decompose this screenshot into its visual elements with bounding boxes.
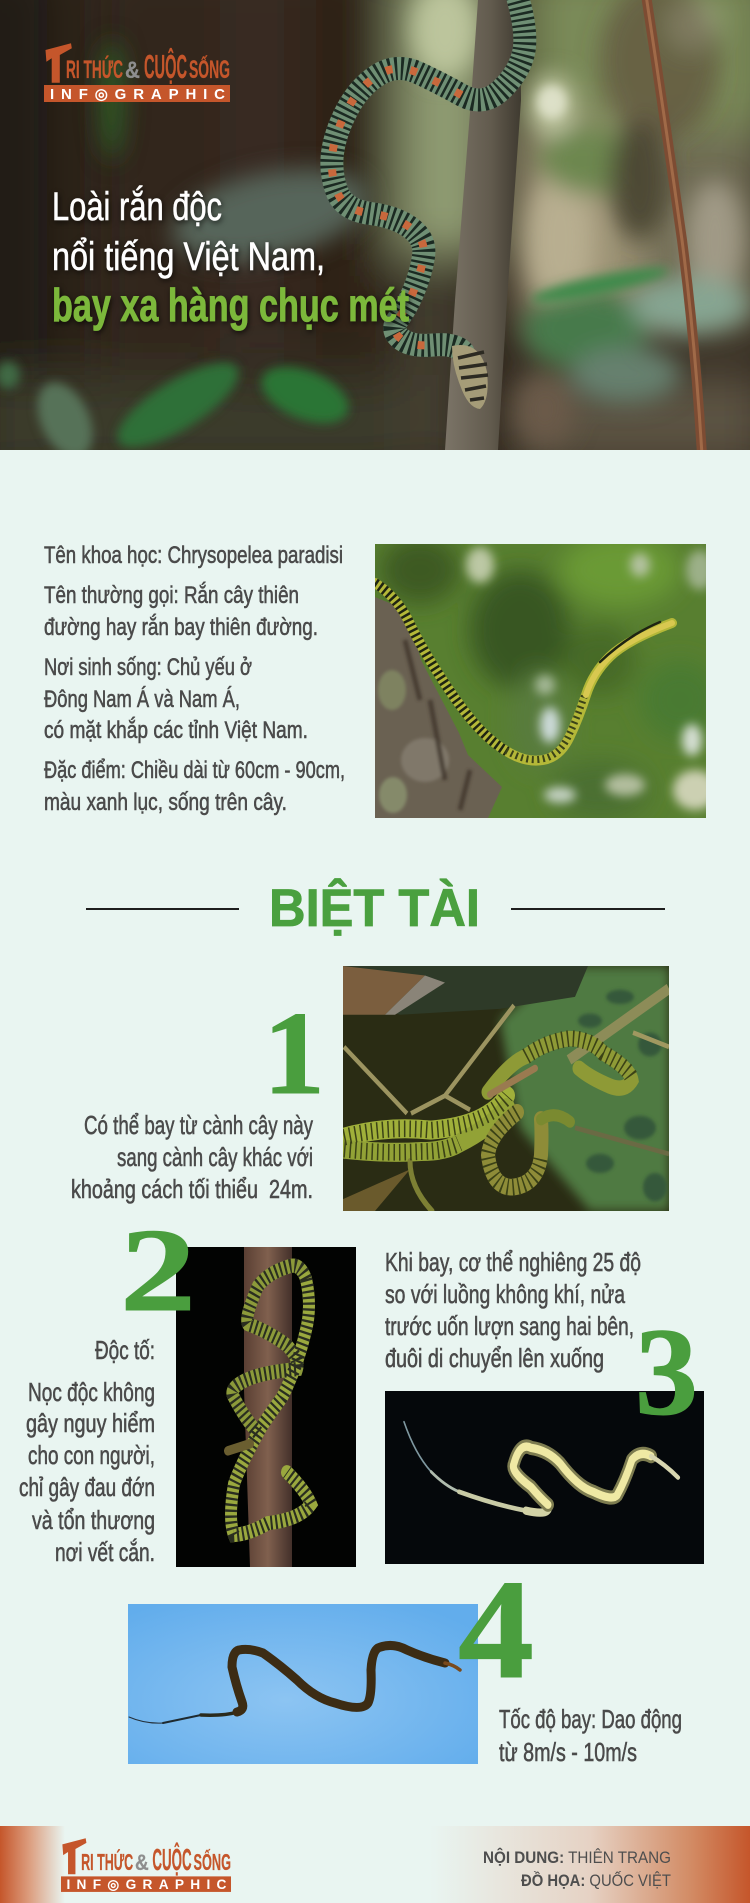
- text block: facts: Đông Nam Á và Nam Á,: [44, 686, 240, 713]
- footer logo: CUỘC: [152, 1843, 192, 1877]
- text block: facts: [44, 542, 345, 816]
- credits: NỘI DUNG: THIÊN TRANG: [483, 1848, 671, 1867]
- credits: [483, 1848, 671, 1890]
- text: skill 2: [19, 1335, 155, 1567]
- text: skill 1: sang cành cây khác với: [117, 1142, 313, 1172]
- snake body: [332, 0, 525, 352]
- footer logo: INF◎GRAPHIC: [66, 1877, 227, 1892]
- text: skill 2: nơi vết cắn.: [55, 1537, 155, 1567]
- text: skill 2: gây nguy hiểm: [26, 1408, 155, 1438]
- panel: header photo with title: [0, 0, 750, 490]
- title: Loài rắn độc: [52, 184, 222, 229]
- photo: snake in blue sky: [128, 1604, 478, 1764]
- text: skill 3: [385, 1247, 641, 1373]
- title: bay xa hàng chục mét: [52, 279, 409, 331]
- panel: skill 3: [385, 1247, 704, 1564]
- text block: facts: Đặc điểm: Chiều dài từ 60cm - 90cm,: [44, 757, 345, 784]
- snake head: [452, 345, 488, 409]
- photo: snake gliding at night: [385, 1391, 704, 1564]
- text: skill 1: [71, 1110, 313, 1204]
- logo: Tri Thức & Cuộc Sống: CUỘC: [144, 47, 187, 85]
- text block: facts: Tên khoa học: Chrysopelea paradisi: [44, 542, 343, 569]
- text block: facts: đường hay rắn bay thiên đường.: [44, 614, 318, 641]
- photo: snake coiled around trunk: [176, 1247, 356, 1567]
- photo: snakes in terrarium: [343, 966, 669, 1211]
- text: skill 2: cho con người,: [28, 1440, 155, 1470]
- text: skill 2: Nọc độc không: [28, 1377, 155, 1407]
- text: skill 2: chỉ gây đau đớn: [19, 1472, 155, 1502]
- title: [52, 184, 409, 331]
- photo: snake on a branch: [0, 0, 750, 450]
- title: nổi tiếng Việt Nam,: [52, 235, 325, 279]
- number 2: 2: [120, 1204, 196, 1336]
- panel: species facts: [44, 534, 720, 820]
- text block: facts: Nơi sinh sống: Chủ yếu ở: [44, 654, 252, 681]
- footer logo: RI THỨC: [81, 1849, 133, 1875]
- text: skill 1: Có thể bay từ cành cây này: [84, 1110, 313, 1140]
- logo: Tri Thức & Cuộc Sống: &: [125, 57, 140, 84]
- text: skill 2: Độc tố:: [95, 1335, 155, 1365]
- text: skill 3: so với luồng không khí, nửa: [385, 1279, 625, 1309]
- panel: skill 1: [71, 966, 669, 1211]
- photo: green snake on bark: [375, 544, 706, 818]
- logo: Tri Thức & Cuộc Sống: RI THỨC: [66, 54, 123, 84]
- text: skill 3: trước uốn lượn sang hai bên,: [385, 1311, 634, 1341]
- number 3: 3: [635, 1304, 698, 1442]
- text: skill 4: [499, 1704, 682, 1767]
- heading: BIỆT TÀI: BIỆT TÀI: [269, 877, 480, 938]
- text: skill 3: Khi bay, cơ thể nghiêng 25 độ: [385, 1247, 641, 1277]
- footer logo: SỐNG: [194, 1849, 231, 1875]
- text block: facts: màu xanh lục, sống trên cây.: [44, 789, 287, 816]
- logo: Tri Thức & Cuộc Sống: SỐNG: [189, 54, 230, 84]
- number 4: 4: [458, 1550, 534, 1708]
- vine: [646, 0, 702, 455]
- panel: footer: [0, 1826, 750, 1903]
- text block: facts: Tên thường gọi: Rắn cây thiên: [44, 582, 299, 609]
- branch: [445, 0, 521, 450]
- text: skill 4: Tốc độ bay: Dao động: [499, 1704, 682, 1734]
- panel: skill 4: [128, 1550, 682, 1767]
- logo: Tri Thức & Cuộc Sống: INF◎GRAPHIC: [50, 86, 225, 103]
- number 1: 1: [263, 987, 325, 1119]
- panel: skill 2: [19, 1204, 356, 1567]
- text: skill 2: và tổn thương: [32, 1505, 155, 1535]
- text: skill 1: khoảng cách tối thiểu 24m.: [71, 1174, 313, 1204]
- text: skill 3: đuôi di chuyển lên xuống: [385, 1343, 604, 1373]
- credits: ĐỒ HỌA: QUỐC VIỆT: [521, 1870, 671, 1890]
- text block: facts: có mặt khắp các tỉnh Việt Nam.: [44, 717, 308, 744]
- logo: Tri Thức & Cuộc Sống: [44, 43, 230, 103]
- text: skill 4: từ 8m/s - 10m/s: [499, 1737, 637, 1767]
- footer logo: &: [135, 1850, 149, 1875]
- footer logo: [61, 1838, 231, 1892]
